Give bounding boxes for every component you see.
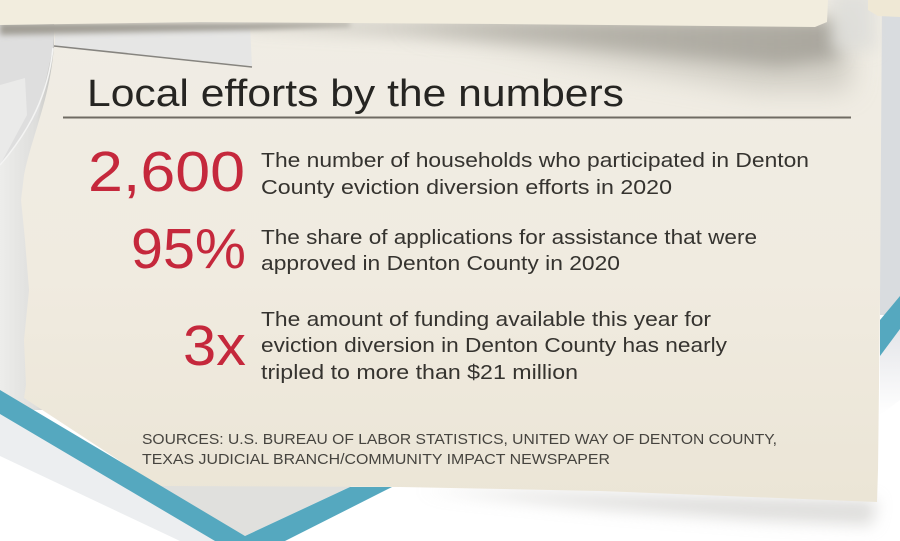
description: funding bbox=[261, 308, 728, 384]
number: 3x: 3x bbox=[183, 314, 246, 378]
sources bbox=[142, 431, 777, 468]
description: approvals: The share of applications for assistance that were bbox=[261, 226, 757, 249]
sources: SOURCES: U.S. BUREAU OF LABOR STATISTICS, UNITED WAY OF DENTON COUNTY, bbox=[142, 431, 777, 448]
title: Local efforts by the numbers bbox=[87, 73, 624, 115]
description: funding: tripled to more than $21 million bbox=[261, 361, 578, 384]
number: 2,600: 2,600 bbox=[88, 140, 245, 204]
stat: 95% approved bbox=[131, 217, 757, 281]
light band under teal chevron bbox=[0, 412, 215, 541]
stat: 3x funding bbox=[183, 308, 728, 384]
description: households: The number of households who participated in Denton bbox=[261, 149, 809, 172]
stat: 2,600 households bbox=[88, 140, 809, 204]
description: funding: The amount of funding available this year for bbox=[261, 308, 711, 331]
teal chevron band bbox=[0, 296, 900, 541]
inner chevron shadow bbox=[155, 486, 352, 536]
left grey backing bbox=[0, 20, 60, 410]
description: households bbox=[261, 149, 809, 199]
shadow under paper right bbox=[420, 490, 877, 525]
number: 95%: 95% bbox=[131, 217, 246, 281]
right grey backing bbox=[880, 15, 900, 315]
top right paper scrap bbox=[868, 0, 900, 17]
description: households: County eviction diversion efforts in 2020 bbox=[261, 176, 672, 199]
description: approvals bbox=[261, 226, 757, 275]
sources: TEXAS JUDICIAL BRANCH/COMMUNITY IMPACT NEWSPAPER bbox=[142, 451, 610, 468]
top torn paper strip bbox=[0, 0, 828, 27]
shadow under top sheet bbox=[250, 0, 876, 90]
translucent tape bbox=[0, 23, 350, 165]
description: funding: eviction diversion in Denton County has nearly bbox=[261, 334, 728, 357]
title rule bbox=[63, 116, 851, 118]
description: approvals: approved in Denton County in 2020 bbox=[261, 252, 620, 275]
right backing below teal bbox=[880, 325, 900, 415]
